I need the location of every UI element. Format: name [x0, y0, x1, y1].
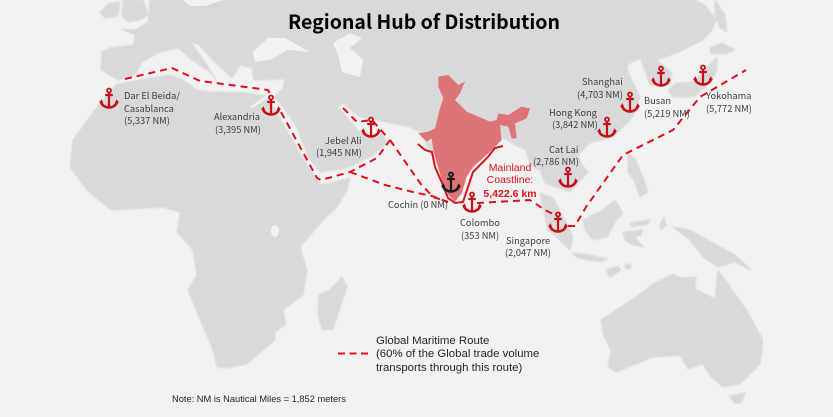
- label: Colombo: (353 NM): [461, 228, 499, 242]
- India map: [418, 75, 530, 202]
- label: Alexandria: Alexandria: [214, 109, 260, 123]
- label: Jebel Ali: Jebel Ali: [325, 133, 362, 147]
- callout: mainland coastline: Coastline:: [487, 174, 533, 186]
- inland seas: [172, 0, 363, 237]
- legend: global maritime route: transports through this route): [376, 362, 522, 374]
- legend: global maritime route: [338, 335, 539, 374]
- icon: anchor Singapore: [548, 212, 568, 232]
- label: Yokohama: (5,772 NM): [706, 101, 752, 115]
- label: Shanghai: (4,703 NM): [577, 87, 623, 101]
- icon: anchor Busan: [651, 66, 671, 86]
- callout: mainland coastline: Mainland: [489, 162, 531, 174]
- callout: mainland coastline: 5,422.6 km: [483, 188, 537, 200]
- label: Dar El Beida: (5,337 NM): [124, 113, 170, 127]
- icon: anchor Cochin: [441, 172, 461, 192]
- icon: anchor Shanghai: [620, 92, 640, 112]
- label: Busan: (5,219 NM): [644, 106, 690, 120]
- label: Shanghai: Shanghai: [582, 74, 623, 88]
- label: Singapore: (2,047 NM): [505, 245, 551, 259]
- legend: global maritime route: (60% of the Global trade volume: [376, 348, 539, 360]
- icon: anchor Dar El Beida: [99, 88, 119, 108]
- note: Note: NM is Nautical Miles = 1,852 meters: [172, 394, 346, 404]
- label: Singapore: Singapore: [506, 233, 550, 247]
- icon: anchor Yokohama: [693, 66, 713, 84]
- global maritime routes: [125, 68, 746, 226]
- label: Alexandria: (3,395 NM): [215, 122, 261, 136]
- icon: anchor Cat Lai: [558, 168, 578, 186]
- icon: anchor Jebel Ali: [361, 118, 381, 136]
- label: Cochin: Cochin (0 NM): [388, 197, 448, 211]
- legend: global maritime route: Global Maritime Route: [376, 335, 489, 347]
- icon: anchor Colombo: [462, 192, 482, 212]
- label: Colombo: Colombo: [460, 215, 500, 229]
- label: Busan: Busan: [644, 93, 671, 107]
- India coastline outline: [418, 144, 503, 203]
- label: Hong Kong: (3,842 NM): [552, 117, 598, 131]
- label: Jebel Ali: (1,945 NM): [316, 145, 362, 159]
- label: Yokohama: Yokohama: [705, 88, 751, 102]
- icon: anchor Hong Kong: [597, 118, 617, 136]
- label: Dar El Beida: Dar El Beida/: [124, 88, 180, 102]
- label: Dar El Beida: Casablanca: [124, 101, 174, 115]
- label: Cat Lai: Cat Lai: [549, 142, 578, 156]
- label: Hong Kong: Hong Kong: [549, 105, 598, 119]
- title: Regional Hub of Distribution: [288, 6, 560, 35]
- icon: anchor Alexandria: [261, 96, 281, 114]
- label: Cat Lai: (2,786 NM): [533, 154, 579, 168]
